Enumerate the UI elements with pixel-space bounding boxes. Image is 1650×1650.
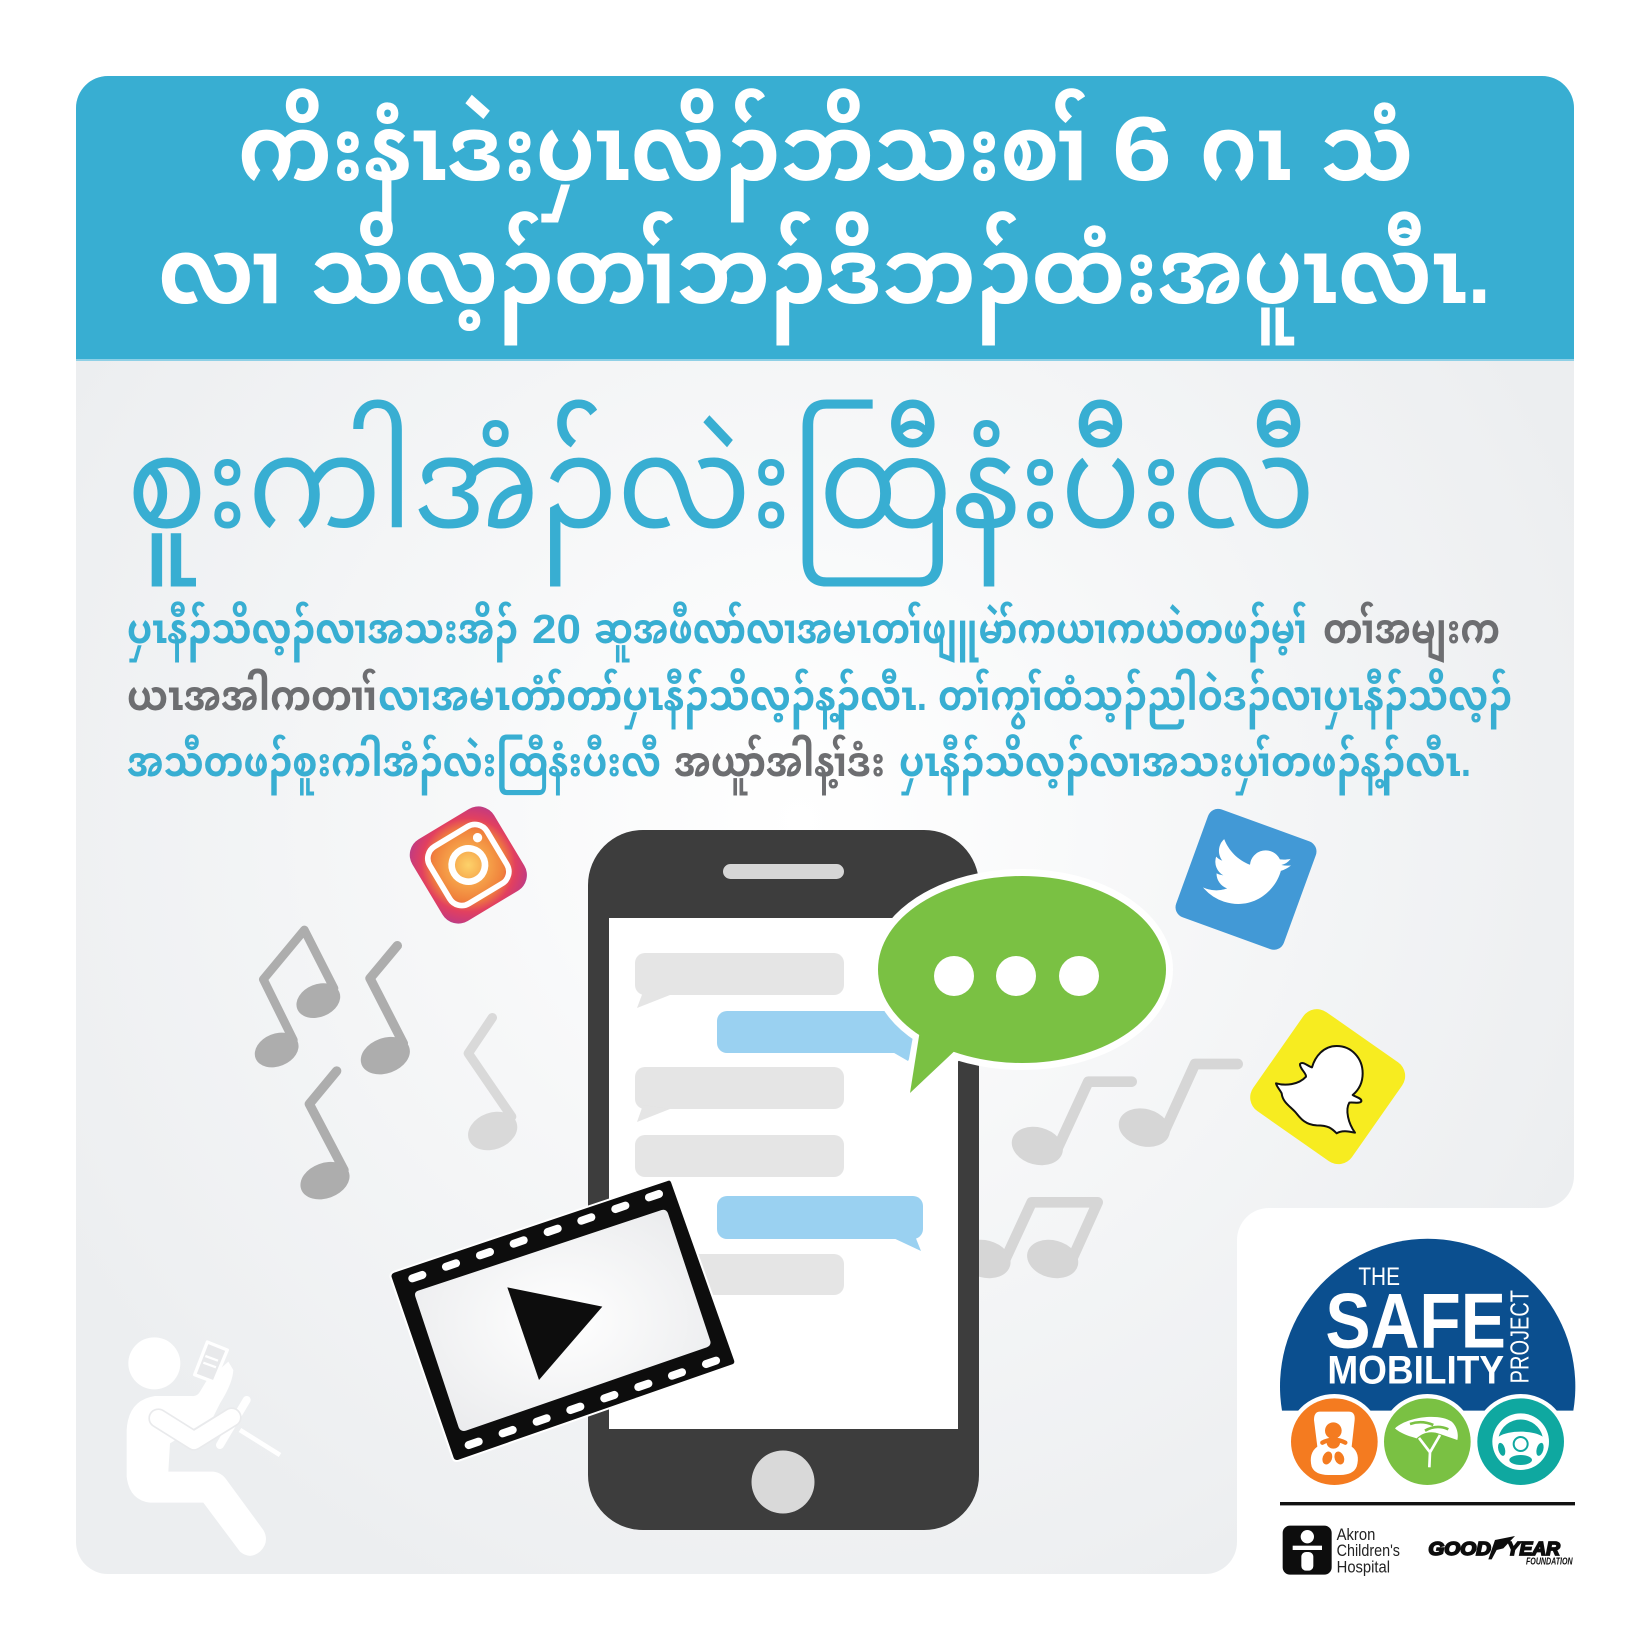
music notes left: [250, 930, 523, 1206]
icon: instagram: [403, 800, 534, 930]
logo badge: [1280, 1239, 1575, 1411]
music notes right: [955, 1064, 1238, 1284]
logo: akron children's hospital: Children's: [1337, 1541, 1400, 1560]
chat messages: [635, 953, 923, 1295]
body line 1 blue: ဆူအဖီလာ်လၢအမၤတၢ်ဖျူမဲာ်ကယၢကယဲတဖၣ်မ့ၢ်: [594, 601, 1307, 663]
title line 2: လၢ: [158, 222, 283, 323]
logo: akron children's hospital: [1283, 1525, 1400, 1576]
title line 2: [158, 210, 1491, 346]
icon: distracted driver: [127, 1337, 280, 1556]
logo: akron children's hospital: Hospital: [1337, 1557, 1390, 1576]
title line 1: [238, 87, 1413, 223]
title line 1: ကိးနံၤဒဲးပှၤလိၣ်ဘိသးစၢ်: [238, 87, 1088, 223]
body line 1 blue: [127, 601, 1307, 663]
logo divider: [1280, 1502, 1575, 1505]
title line 1: 6: [1112, 99, 1172, 200]
body line 3 blue end: ပှၤနီၣ်သိလ့ၣ်လၢအသးပှၢ်တဖၣ်န့ၣ်လီၤ.: [899, 734, 1471, 795]
logo: safe mobility project: [1280, 1239, 1575, 1489]
title line 1: ဂၤ: [1200, 99, 1292, 200]
body line 1 blue: 20: [532, 606, 581, 652]
body text: [127, 601, 1512, 795]
body line 2 blue: လၢအမၤတံာ်တာ်ပှၤနီၣ်သိလ့ၣ်န့ၣ်လီၤ.: [378, 668, 927, 729]
icon: car seat: [1287, 1394, 1382, 1489]
speech bubble: [878, 876, 1166, 1093]
logo: goodyear foundation: FOUNDATION: [1526, 1557, 1573, 1568]
logo text: SAFE: [1325, 1277, 1506, 1365]
title line 2: သိလ့ၣ်တၢ်ဘၣ်ဒိဘၣ်ထံးအပူၤလီၤ.: [310, 210, 1491, 346]
logo: goodyear foundation: [1428, 1536, 1573, 1568]
phone: [588, 830, 979, 1530]
title line 1: သံ: [1320, 99, 1413, 200]
icon: film strip with play button: [390, 1180, 735, 1461]
logo: goodyear foundation: YEAR: [1507, 1538, 1561, 1559]
logo: akron children's hospital: Akron: [1337, 1525, 1375, 1544]
logo text: [1325, 1264, 1534, 1392]
body line 2 blue: [378, 668, 1512, 729]
body line 1 grey: တၢ်အမျးက: [1323, 601, 1500, 663]
icon: steering wheel: [1473, 1394, 1568, 1489]
logo text: THE: [1358, 1264, 1400, 1291]
body line 2 blue: တၢ်ကွၢ်ထံသ့ၣ်ညါဝဲဒၣ်လၢပှၤနီၣ်သိလ့ၣ်: [938, 668, 1512, 729]
icon: snapchat: [1244, 1003, 1412, 1171]
phone speaker: [723, 864, 844, 879]
icon: helmet: [1380, 1394, 1475, 1489]
body line 3 blue: အသီတဖၣ်စူးကါအံၣ်လဲးထြီနံးပီးလီ: [127, 734, 661, 795]
logo text: PROJECT: [1506, 1290, 1534, 1383]
body line 2 grey: ယၤအအါကတၢၢ်: [127, 668, 377, 719]
body line 1 blue: ပှၤနီၣ်သိလ့ၣ်လၢအသးအိၣ်: [127, 601, 518, 662]
icon: twitter: [1173, 806, 1319, 953]
phone home button: [752, 1450, 814, 1514]
header band: [76, 76, 1574, 361]
logo: goodyear foundation: GOOD: [1428, 1538, 1491, 1559]
subheading: စူးကါအံၣ်လဲးထြီနံးပီးလီ: [127, 400, 1315, 586]
body line 3 grey: အယူာ်အါန့ၢ်ဒံး: [674, 734, 885, 795]
logo text: MOBILITY: [1327, 1348, 1504, 1392]
